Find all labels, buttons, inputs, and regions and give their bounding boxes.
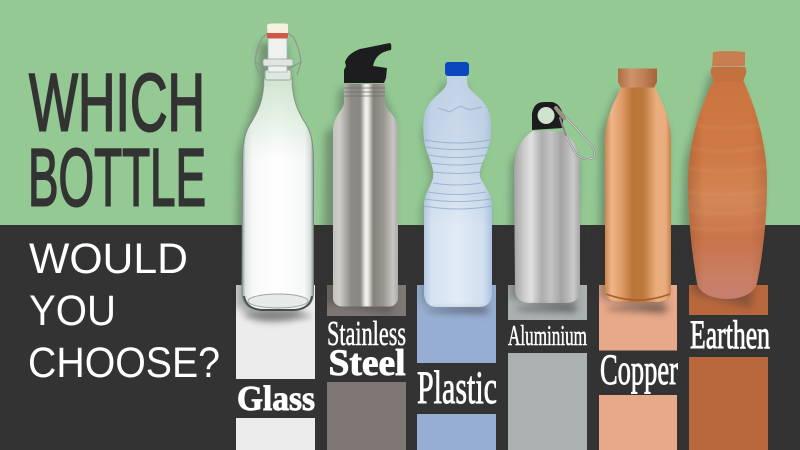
label: stainless steel: Stainless (327, 314, 406, 353)
bottle cap (344, 43, 391, 83)
icon: earthen bottle (682, 51, 767, 308)
bottle cap with loop (537, 106, 555, 124)
bottle lid (712, 51, 745, 66)
label: copper: Copper (600, 347, 678, 394)
panel: glass column (236, 285, 315, 450)
label: glass: Glass (237, 379, 315, 418)
clay texture (688, 125, 767, 230)
panel: aluminium column (508, 285, 587, 450)
icon: aluminium bottle (509, 102, 594, 313)
bottle ripples (424, 106, 492, 209)
label: aluminium: Aluminium (508, 321, 587, 352)
icon: stainless steel bottle (323, 43, 398, 315)
carabiner clip (556, 107, 594, 159)
label: stainless steel: Steel (328, 343, 406, 384)
subtitle: would you choose: YOU (29, 287, 116, 335)
icon: glass bottle (235, 24, 314, 322)
panel: stainless steel column (327, 285, 406, 450)
panel: plastic column (417, 285, 497, 450)
icon: copper bottle (599, 68, 671, 315)
bottle cap (445, 62, 469, 76)
bottle lid (618, 68, 657, 88)
subtitle: would you choose: WOULD (29, 235, 188, 283)
bottle base shadows (244, 305, 670, 321)
green background (0, 0, 800, 225)
title: which bottle: WHICH (29, 58, 205, 148)
panel: earthen column (689, 285, 770, 450)
title: which bottle: BOTTLE (28, 132, 206, 224)
label: plastic: Plastic (417, 362, 497, 414)
subtitle: would you choose: CHOOSE? (28, 339, 220, 387)
title: which bottle (28, 58, 206, 224)
dark background (0, 225, 800, 450)
bottle collar (711, 67, 746, 82)
label: stainless steel (327, 314, 406, 384)
subtitle: would you choose (28, 235, 220, 387)
bottle stopper (267, 24, 288, 38)
panel: copper column (599, 285, 678, 450)
icon: plastic bottle (421, 62, 492, 315)
